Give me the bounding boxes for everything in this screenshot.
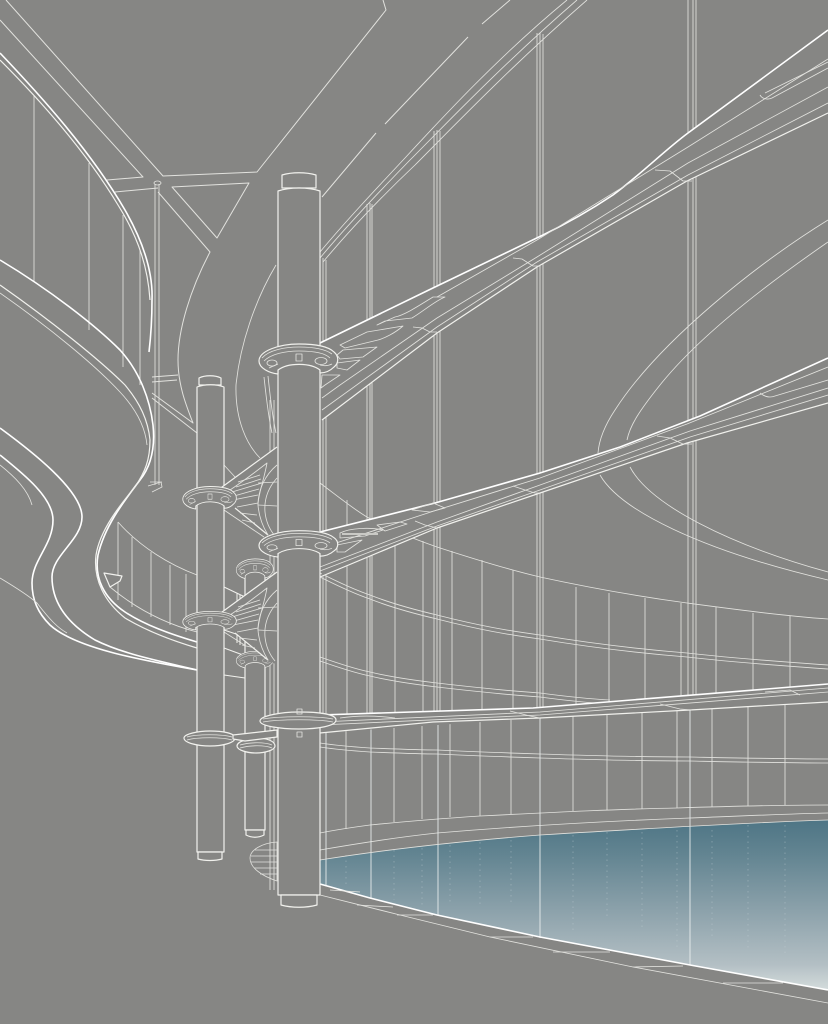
large front column	[278, 173, 320, 907]
small rear column collars	[236, 559, 275, 753]
facade double mullions	[320, 0, 696, 965]
upper ring beam	[320, 30, 828, 420]
lower triangular bracket	[218, 572, 277, 665]
back arcs behind columns	[224, 265, 276, 890]
stair cone below large column	[250, 842, 277, 881]
dotted water reflections	[346, 825, 785, 955]
middle column	[197, 376, 224, 860]
slim suspension rod	[148, 181, 162, 492]
left ribbon curves	[0, 428, 197, 670]
water surface	[320, 820, 828, 990]
facade thin panel lines	[346, 500, 790, 829]
small rear column	[245, 568, 265, 837]
lower ring beam	[320, 684, 828, 733]
left gallery wall panels	[34, 95, 140, 385]
facade horizontal rails	[320, 483, 828, 850]
upper triangular bracket	[218, 447, 277, 540]
water edge and floor lines	[320, 820, 828, 1003]
middle ring beam	[320, 358, 828, 577]
left gallery balcony curves	[0, 53, 197, 648]
large column collars	[259, 344, 338, 737]
ceiling beams and triangle	[0, 0, 510, 433]
glazing top edge lines	[320, 0, 587, 262]
far curved wall arcs	[598, 220, 828, 580]
middle column collars	[183, 486, 277, 746]
slats between columns	[224, 587, 270, 678]
lower balcony railing	[104, 522, 197, 632]
